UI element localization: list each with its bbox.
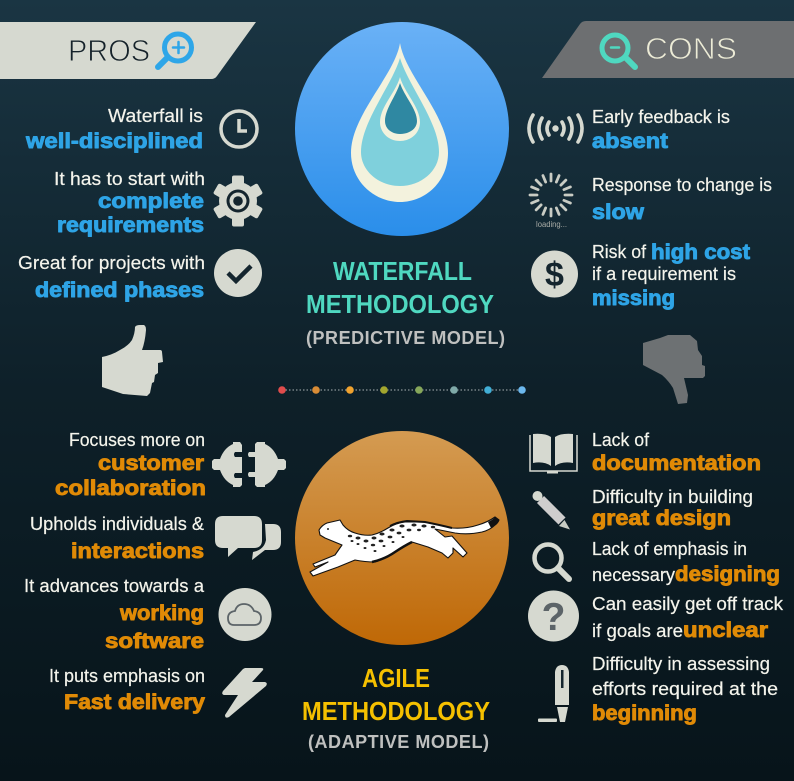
icon: open book bbox=[530, 434, 577, 474]
title: waterfall methodology: WATERFALL bbox=[333, 256, 472, 286]
waterfall circle with water drop bbox=[295, 22, 509, 236]
icon: question circle bbox=[528, 590, 579, 642]
text: early feedback: absent bbox=[592, 130, 668, 153]
text: complete requirements: requirements bbox=[57, 214, 204, 237]
text: defined phases bbox=[18, 253, 205, 302]
title: agile methodology bbox=[302, 663, 490, 752]
text: designing: designing bbox=[675, 563, 780, 586]
text: customer collaboration: customer bbox=[98, 452, 204, 475]
text: well-disciplined: Waterfall is bbox=[108, 106, 203, 126]
heading: cons: CONS bbox=[645, 31, 737, 66]
dotted divider bbox=[278, 386, 526, 394]
icon: fountain pen bbox=[538, 665, 569, 722]
text: complete requirements: It has to start with bbox=[54, 169, 205, 189]
text: early feedback bbox=[592, 107, 730, 153]
text: fast delivery bbox=[49, 666, 205, 714]
text: complete requirements bbox=[54, 169, 205, 237]
icon: magnifier minus bbox=[602, 35, 635, 67]
agile circle with cheetah bbox=[295, 431, 509, 645]
text: high cost: if a requirement is bbox=[592, 264, 736, 284]
text: response to change bbox=[592, 175, 772, 224]
text: working software: software bbox=[105, 630, 204, 653]
text: working software: It advances towards a bbox=[24, 576, 205, 596]
text: well-disciplined: well-disciplined bbox=[25, 130, 203, 153]
text: beginning: Difficulty in assessing bbox=[592, 654, 770, 674]
text: response to change: Response to change is bbox=[592, 175, 772, 195]
title: agile methodology: AGILE bbox=[362, 663, 430, 693]
text: designing: Lack of emphasis in bbox=[592, 539, 747, 559]
text: documentation: Lack of bbox=[592, 430, 650, 450]
text: beginning: efforts required at the bbox=[592, 679, 778, 699]
title: waterfall methodology bbox=[306, 256, 505, 348]
text: response to change: slow bbox=[592, 201, 645, 224]
text: interactions bbox=[30, 514, 204, 563]
text: high cost bbox=[592, 241, 750, 310]
text: interactions: interactions bbox=[71, 540, 204, 563]
text: working software bbox=[24, 576, 205, 653]
icon: thumbs up bbox=[102, 325, 163, 396]
icon: magnifier plus bbox=[158, 34, 192, 67]
text: customer collaboration bbox=[55, 430, 206, 500]
banner: pros bbox=[0, 22, 256, 79]
icon: plug bbox=[212, 442, 286, 487]
icon: lightning bolt bbox=[222, 668, 267, 718]
text: great design bbox=[592, 487, 753, 530]
text: early feedback: Early feedback is bbox=[592, 107, 730, 127]
text: defined phases: Great for projects with bbox=[18, 253, 205, 273]
title: agile methodology: METHODOLOGY bbox=[302, 696, 490, 726]
icon: cheetah bbox=[310, 517, 499, 576]
icon: gear bbox=[213, 176, 263, 226]
icon: magnifier bbox=[534, 544, 569, 579]
title: waterfall methodology: (PREDICTIVE MODEL) bbox=[306, 328, 505, 348]
text: great design: great design bbox=[592, 507, 731, 530]
text: working software: working bbox=[119, 602, 204, 625]
panel: waterfall pros bbox=[18, 106, 263, 396]
text: customer collaboration: collaboration bbox=[55, 477, 206, 500]
icon: loading spinner bbox=[530, 174, 572, 229]
title: waterfall methodology: METHODOLOGY bbox=[306, 289, 494, 319]
text: unclear bbox=[592, 594, 784, 642]
text: unclear: unclear bbox=[683, 619, 768, 642]
text: unclear: Can easily get off track bbox=[592, 594, 784, 614]
text: beginning bbox=[592, 654, 778, 725]
text: documentation: documentation bbox=[592, 452, 761, 475]
title: agile methodology: (ADAPTIVE MODEL) bbox=[308, 732, 489, 752]
icon: cloud circle bbox=[218, 588, 272, 641]
panel: agile cons bbox=[528, 430, 784, 725]
icon: thumbs down bbox=[643, 335, 705, 404]
text: documentation bbox=[592, 430, 761, 475]
text: customer collaboration: Focuses more on bbox=[69, 430, 205, 450]
banner: cons bbox=[542, 21, 794, 78]
text: interactions: Upholds individuals & bbox=[30, 514, 204, 534]
icon: loading spinner: loading... bbox=[536, 220, 567, 229]
icon: question circle: ? bbox=[542, 596, 565, 639]
icon: clock bbox=[221, 111, 257, 147]
text: beginning: beginning bbox=[592, 702, 697, 725]
text: fast delivery: Fast delivery bbox=[64, 691, 205, 714]
text: high cost: missing bbox=[592, 287, 675, 310]
panel: waterfall cons bbox=[529, 107, 772, 404]
icon: water drop bbox=[351, 43, 448, 202]
text: unclear: if goals are bbox=[592, 621, 683, 641]
text: fast delivery: It puts emphasis on bbox=[49, 666, 205, 686]
icon: signal bbox=[529, 115, 582, 142]
panel: agile pros bbox=[24, 430, 286, 718]
icon: dollar circle bbox=[531, 250, 578, 298]
text: high cost: high cost bbox=[651, 241, 750, 264]
text: designing: necessary bbox=[592, 565, 675, 585]
text: defined phases: defined phases bbox=[35, 279, 204, 302]
icon: pencil bbox=[532, 491, 570, 530]
icon: chat bubbles bbox=[215, 516, 281, 560]
text: well-disciplined bbox=[25, 106, 203, 153]
text: high cost: Risk of bbox=[592, 242, 647, 262]
text: designing bbox=[592, 539, 780, 586]
text: great design: Difficulty in building bbox=[592, 487, 753, 507]
icon: dollar circle: $ bbox=[545, 256, 564, 294]
text: complete requirements: complete bbox=[98, 190, 204, 213]
icon: check circle bbox=[214, 249, 262, 297]
heading: pros: PROS bbox=[68, 33, 150, 68]
